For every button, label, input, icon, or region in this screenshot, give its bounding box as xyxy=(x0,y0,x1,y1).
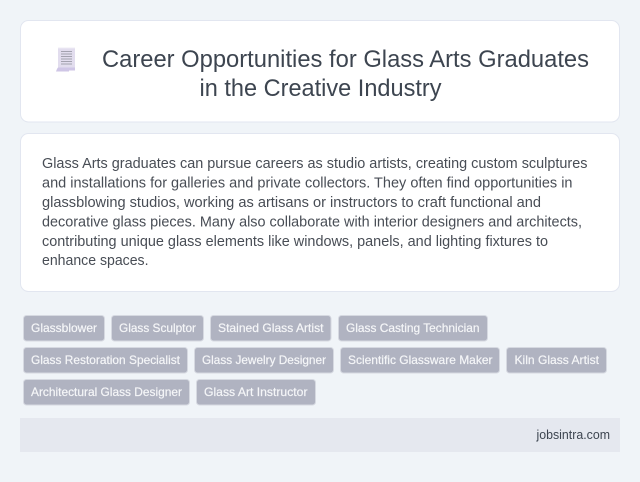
text block: description: decorative glass pieces. Many also collaborate with interior designers and architects, xyxy=(42,214,582,230)
tag: Kiln Glass Artist xyxy=(506,348,606,373)
tag: Stained Glass Artist: Stained Glass Artist xyxy=(218,321,324,335)
panel: description xyxy=(20,134,620,292)
footer: site name: jobsintra.com xyxy=(536,428,610,442)
tag: Stained Glass Artist xyxy=(210,316,331,341)
tag: Architectural Glass Designer xyxy=(24,380,190,405)
title: in the Creative Industry xyxy=(200,75,442,102)
text block: description: Glass Arts graduates can pursue careers as studio artists, creating custom sculptures xyxy=(42,156,588,172)
tag: Glass Restoration Specialist xyxy=(24,348,188,373)
tag: Glassblower: Glassblower xyxy=(31,321,97,335)
title xyxy=(102,46,589,102)
tag: Glass Casting Technician: Glass Casting Technician xyxy=(346,321,480,335)
tag: Scientific Glassware Maker xyxy=(340,348,500,373)
tag: Glass Jewelry Designer xyxy=(194,348,334,373)
tag: Glass Art Instructor xyxy=(196,380,316,405)
tag: Glass Casting Technician xyxy=(338,316,488,341)
panel: title card xyxy=(20,20,620,122)
tag list: related careers xyxy=(24,316,606,405)
tag: Glassblower xyxy=(24,316,104,341)
tag: Glass Sculptor: Glass Sculptor xyxy=(119,321,196,335)
text block: description: glassblowing studios, working as artisans or instructors to craft functional and xyxy=(42,195,541,211)
tag: Kiln Glass Artist: Kiln Glass Artist xyxy=(514,353,600,367)
tag: Scientific Glassware Maker: Scientific Glassware Maker xyxy=(348,353,492,367)
text block: description: contributing unique glass elements like windows, panels, and lighting fixtures to xyxy=(42,234,548,250)
text block: description: enhance spaces. xyxy=(42,253,148,269)
tag: Glass Sculptor xyxy=(112,316,204,341)
text block: description xyxy=(42,156,588,269)
icon: document scroll xyxy=(56,48,75,72)
footer xyxy=(20,418,620,452)
tag: Architectural Glass Designer: Architectural Glass Designer xyxy=(31,385,182,399)
text block: description: and installations for galleries and private collectors. They often find opportunities in xyxy=(42,176,572,192)
title: Career Opportunities for Glass Arts Graduates xyxy=(102,46,589,73)
tag: Glass Art Instructor: Glass Art Instructor xyxy=(204,385,308,399)
tag: Glass Restoration Specialist: Glass Restoration Specialist xyxy=(31,353,181,367)
tag: Glass Jewelry Designer: Glass Jewelry Designer xyxy=(202,353,326,367)
